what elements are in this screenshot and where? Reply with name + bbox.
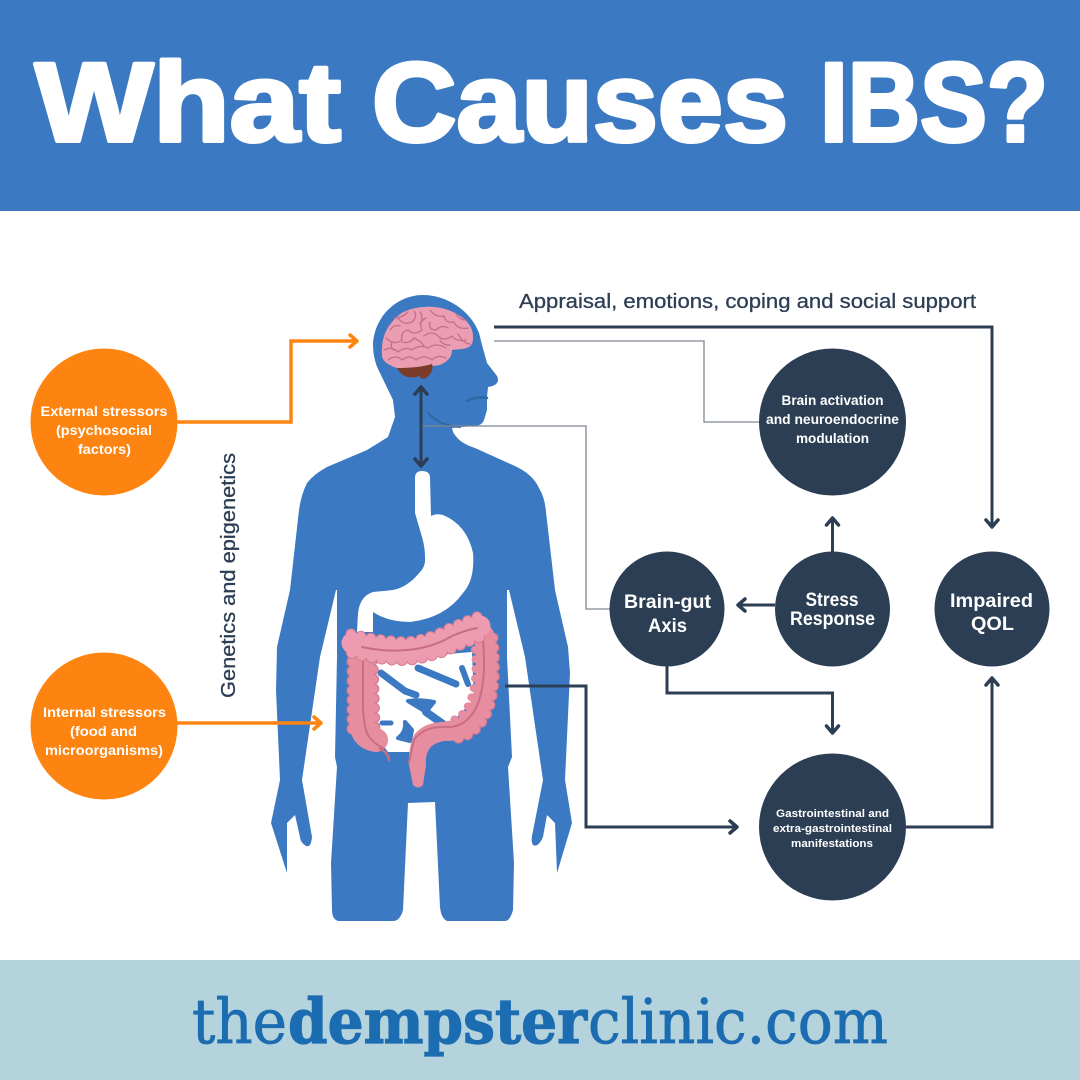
circle: stress response: Stress	[806, 590, 858, 611]
arrow: brain to impaired QOL	[494, 327, 998, 527]
mouth and jaw lines	[428, 397, 487, 427]
arrow: GI manifestations to impaired QOL	[906, 678, 998, 827]
appendix	[380, 749, 389, 760]
label: genetics: Genetics and epigenetics	[218, 453, 240, 698]
colon	[351, 616, 494, 788]
circle: external stressors	[30, 348, 178, 496]
title: IBS?	[820, 40, 1048, 165]
circle: brain-gut axis	[610, 552, 724, 666]
thin line: brain to brain activation	[494, 341, 760, 422]
circle: external stressors: factors)	[78, 441, 131, 457]
arrow: stress to brain-gut axis	[738, 599, 775, 611]
circle: stress response: Response	[790, 609, 875, 630]
brain folds	[384, 310, 470, 360]
header banner	[0, 0, 1080, 211]
circle: brain-gut axis: Axis	[648, 615, 687, 637]
ascending colon	[352, 650, 383, 748]
small intestine	[376, 652, 474, 752]
thin line: neck to brain-gut axis	[421, 426, 611, 609]
sigmoid colon and rectum	[409, 722, 452, 788]
circle: external stressors: (psychosocial	[56, 422, 152, 438]
website address	[192, 985, 888, 1058]
double arrow: brain-gut connection	[415, 387, 427, 466]
title	[35, 40, 1048, 165]
website address: dempster	[288, 985, 588, 1058]
circle: stress response	[775, 552, 890, 666]
arrow: gut to GI manifestations	[505, 686, 737, 833]
circle: internal stressors	[30, 652, 178, 800]
transverse colon	[351, 616, 484, 660]
label: appraisal: Appraisal, emotions, coping and social support	[519, 291, 976, 313]
arrow: stress to brain activation	[826, 518, 838, 552]
circle: impaired QOL	[934, 552, 1050, 666]
circle: brain-gut axis: Brain-gut	[624, 591, 712, 613]
circle: GI manifestations	[759, 754, 906, 900]
circle: GI manifestations: manifestations	[791, 838, 873, 850]
brain	[382, 307, 473, 379]
descending colon	[448, 635, 494, 739]
arrow: brain-gut axis to GI manifestations	[667, 666, 838, 733]
circle: impaired QOL: QOL	[971, 613, 1014, 635]
website address: the	[192, 985, 287, 1058]
title: Causes	[372, 40, 788, 165]
orange arrow: internal stressors to gut	[177, 717, 321, 729]
human body silhouette	[271, 295, 572, 921]
footer band	[0, 960, 1080, 1080]
circle: brain activation: modulation	[796, 431, 869, 446]
circle: brain activation: Brain activation	[782, 393, 884, 408]
orange arrow: external stressors to brain	[177, 335, 357, 422]
cerebellum	[397, 364, 433, 379]
circle: brain activation	[759, 348, 906, 496]
circle: internal stressors: Internal stressors	[43, 704, 166, 720]
circle: external stressors: External stressors	[40, 403, 168, 419]
circle: brain activation: and neuroendocrine	[766, 412, 899, 427]
circle: internal stressors: (food and	[70, 723, 137, 739]
website address: clinic.com	[588, 985, 888, 1058]
circle: internal stressors: microorganisms)	[45, 742, 163, 758]
title: What	[35, 40, 341, 165]
circle: GI manifestations: Gastrointestinal and	[776, 808, 889, 820]
circle: impaired QOL: Impaired	[950, 590, 1033, 612]
stomach and oesophagus	[357, 471, 473, 632]
circle: GI manifestations: extra-gastrointestinal	[773, 823, 892, 835]
